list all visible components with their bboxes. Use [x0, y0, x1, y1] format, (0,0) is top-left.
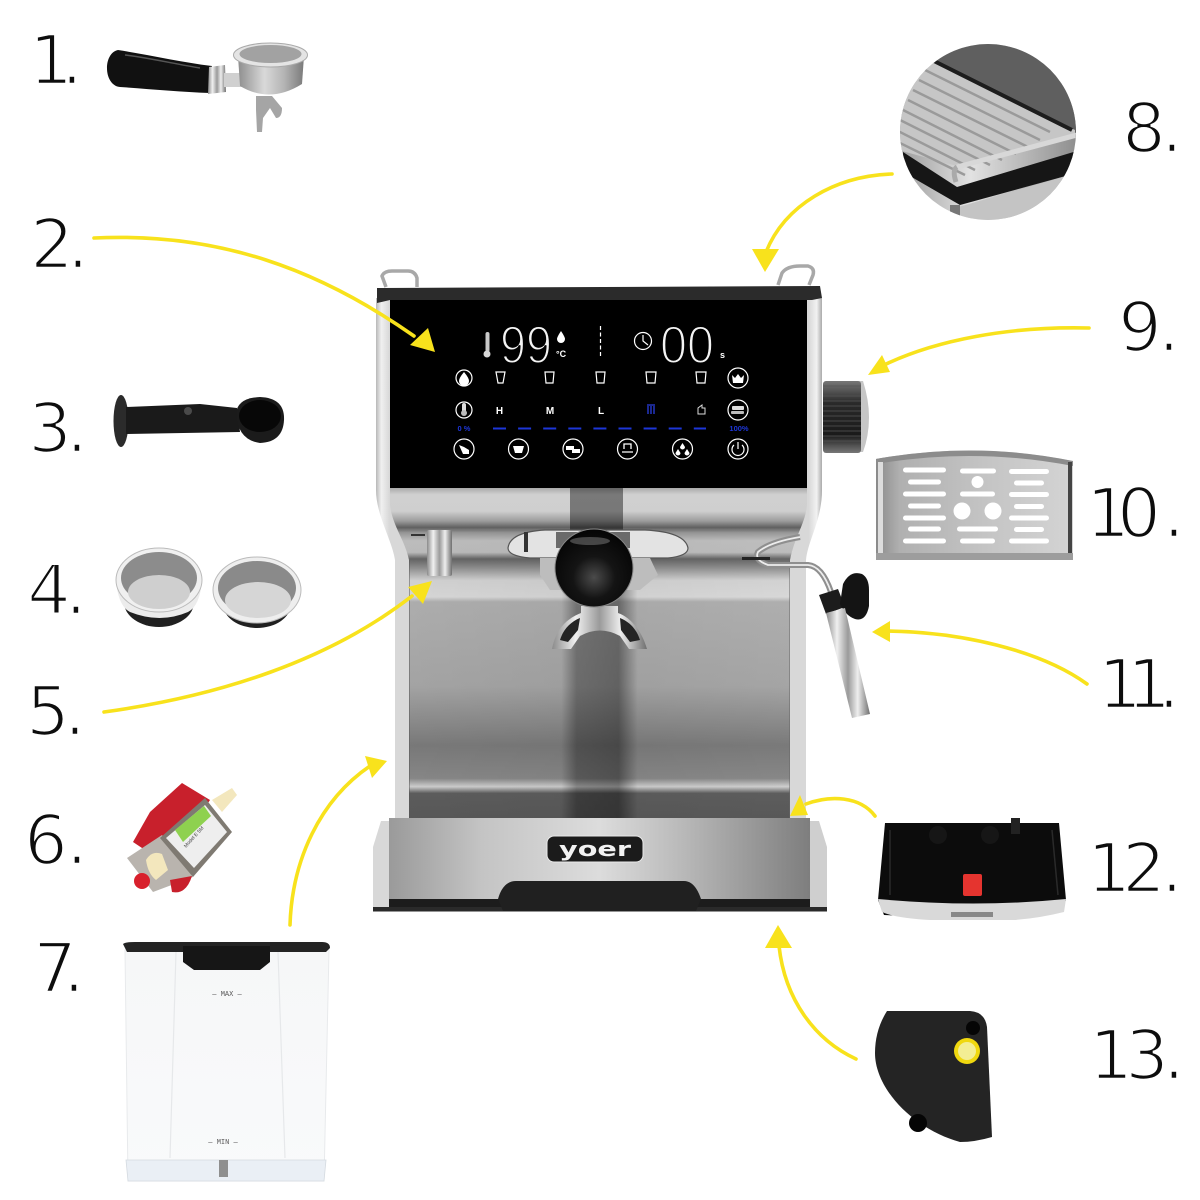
number 10: 10. [1086, 474, 1185, 554]
number 8: 8. [1122, 89, 1183, 169]
drop icon [557, 331, 565, 343]
number 1: 1. [29, 21, 83, 101]
temperature readout: 99 [500, 316, 552, 375]
number 5: 5. [26, 672, 86, 752]
water level bar [458, 424, 749, 433]
front base [373, 818, 827, 912]
arrow 12 [790, 795, 875, 816]
back panel [385, 488, 810, 820]
item 10: drip tray grid [876, 450, 1073, 560]
item 3: tamper [114, 395, 284, 447]
time readout: 00 [660, 316, 714, 375]
item 6: pump [127, 783, 237, 892]
row 2 icons and levels [456, 400, 748, 420]
handle ball [555, 529, 633, 607]
row 2 icons and levels: L [598, 406, 604, 417]
yoer logo: yoer [559, 837, 631, 861]
number 3: 3. [28, 389, 88, 469]
item 4: filter baskets [116, 548, 301, 628]
number 11: 11. [1098, 645, 1180, 725]
steel shell [376, 298, 822, 818]
steam wand [742, 537, 870, 718]
divider [600, 326, 602, 356]
top strip [377, 286, 822, 303]
arrow 2 [94, 237, 435, 352]
clock icon [634, 332, 652, 350]
degree label: °C [556, 349, 567, 359]
row 3 buttons [454, 439, 748, 459]
basket right [213, 557, 301, 628]
number 2: 2. [30, 205, 89, 285]
control panel [377, 286, 822, 488]
water level bar: 0 % [458, 424, 471, 433]
number 9: 9. [1118, 288, 1180, 368]
number 13: 13. [1089, 1016, 1185, 1096]
number 7: 7. [33, 929, 85, 1009]
yoer logo [547, 836, 643, 862]
item 8: top cup tray detail [898, 42, 1080, 224]
row 1 icons [456, 368, 748, 388]
water level bar: 100% [729, 424, 749, 433]
number 12: 12. [1087, 829, 1183, 909]
arrow 8 [752, 174, 892, 272]
thermometer icon [484, 332, 490, 358]
hot water outlet [411, 530, 452, 576]
arrow 7 [290, 756, 387, 925]
yellow button [954, 1038, 980, 1064]
item 1: portafilter [107, 43, 307, 132]
number 4: 4. [27, 551, 87, 631]
spout [552, 606, 647, 649]
arrow 13 [765, 925, 856, 1059]
max mark: — MAX — [211, 991, 243, 999]
rotary knob [823, 381, 869, 453]
item 12: drip tray [878, 818, 1066, 920]
row 2 icons and levels: M [546, 406, 554, 417]
pump label text: Model E 5M [183, 825, 205, 849]
seconds label: s [720, 350, 725, 360]
arrow 5 [104, 581, 432, 712]
min mark: — MIN — [207, 1139, 239, 1147]
arrow 11 [872, 621, 1087, 684]
espresso machine [373, 266, 870, 912]
number 6: 6. [24, 801, 88, 881]
item 13: rear plate [875, 1011, 992, 1142]
row 2 icons and levels: H [496, 406, 503, 417]
arrow 9 [868, 328, 1089, 375]
top handles [382, 266, 813, 287]
basket left [116, 548, 202, 627]
item 7: water tank [123, 942, 330, 1181]
drip tray handle [498, 881, 701, 911]
group head [508, 529, 688, 649]
